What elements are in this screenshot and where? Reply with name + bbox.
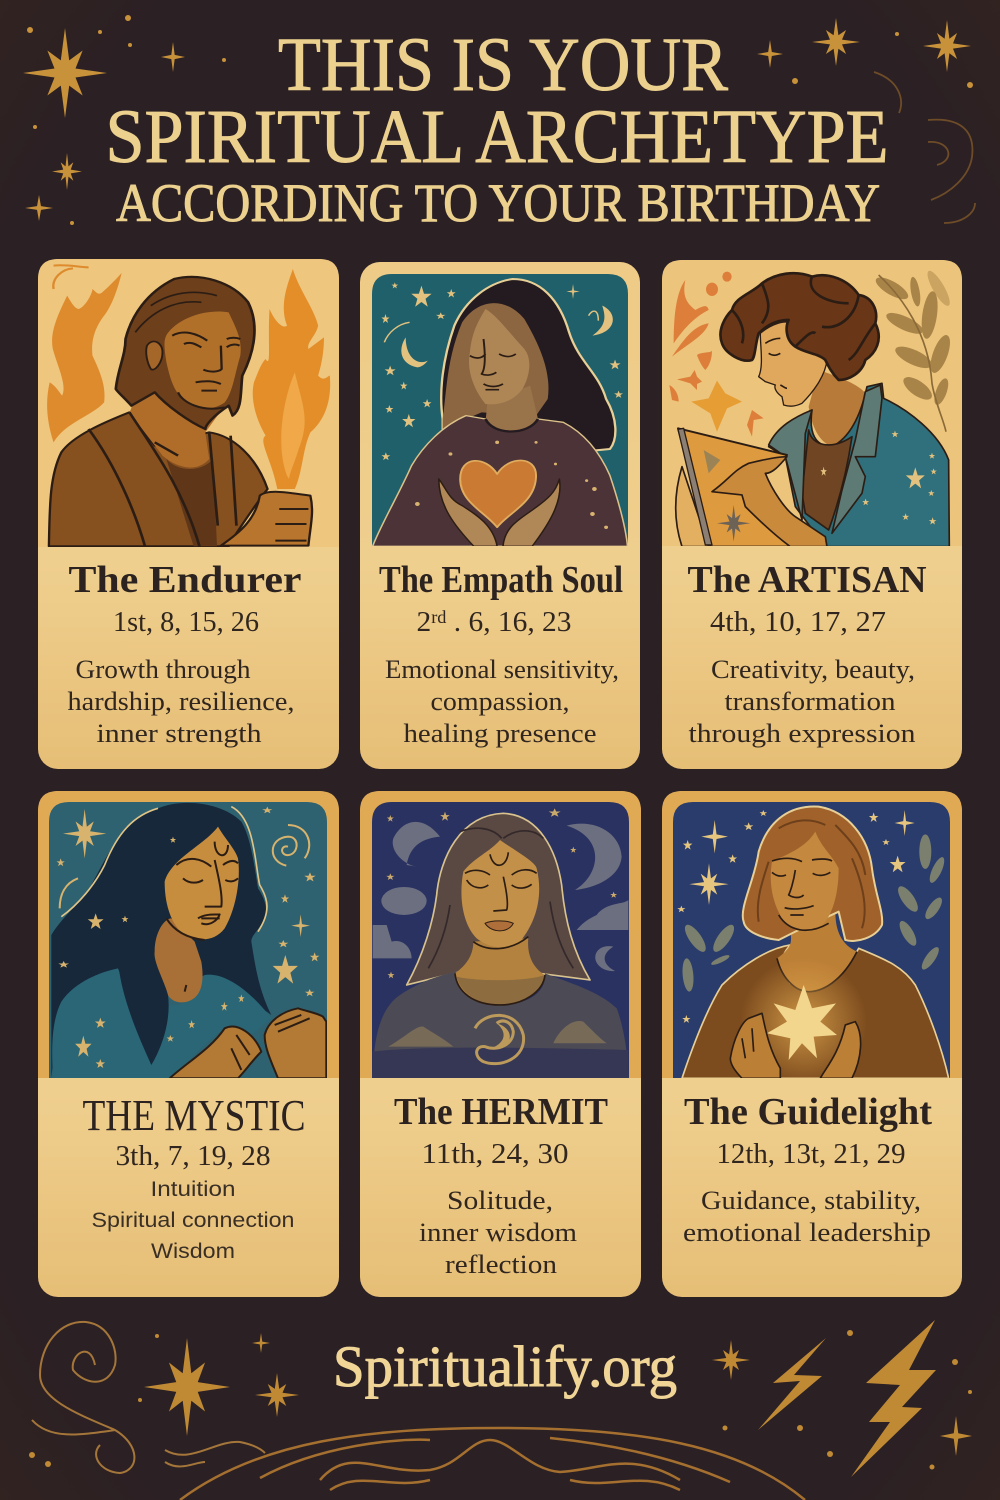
description: Growth through bbox=[76, 655, 250, 684]
card: The Guidelight bbox=[662, 791, 962, 1297]
title: SPIRITUAL ARCHETYPE bbox=[106, 95, 888, 179]
illustration: woman with glowing star bbox=[673, 802, 950, 1085]
card: The Artisan bbox=[662, 260, 962, 769]
illustration: man with flames bbox=[38, 259, 339, 547]
illustration: hermit with moon bbox=[372, 802, 629, 1078]
birthdays: 2 bbox=[416, 606, 431, 638]
image frame bbox=[38, 791, 339, 1078]
card: The Endurer bbox=[38, 259, 339, 769]
description bbox=[683, 1186, 931, 1247]
birthdays: 1st, 8, 15, 26 bbox=[113, 606, 259, 638]
birthdays: 11th, 24, 30 bbox=[422, 1138, 568, 1170]
birthdays: 3th, 7, 19, 28 bbox=[116, 1141, 270, 1172]
title: ACCORDING TO YOUR BIRTHDAY bbox=[116, 173, 880, 233]
footer decoration: bottom arc bbox=[180, 1428, 805, 1500]
description: Solitude, bbox=[447, 1186, 553, 1215]
description: Intuition bbox=[150, 1178, 236, 1201]
illustration: mystic with dark hair bbox=[49, 802, 327, 1078]
name: The HERMIT bbox=[394, 1091, 608, 1133]
description: Creativity, beauty, bbox=[711, 655, 915, 684]
description bbox=[385, 655, 619, 748]
image frame bbox=[662, 791, 962, 1078]
name: THE MYSTIC bbox=[82, 1091, 306, 1140]
birthdays: . 6, 16, 23 bbox=[446, 606, 572, 638]
footer decorations: stars and swirls bbox=[29, 1322, 299, 1473]
description bbox=[92, 1178, 294, 1263]
birthdays: 4th, 10, 17, 27 bbox=[710, 606, 886, 638]
description: transformation bbox=[724, 687, 896, 716]
description: compassion, bbox=[430, 687, 570, 716]
description bbox=[688, 655, 916, 748]
birthdays: 12th, 13t, 21, 29 bbox=[716, 1138, 906, 1170]
description: emotional leadership bbox=[683, 1218, 931, 1247]
description: reflection bbox=[445, 1250, 557, 1279]
description: Emotional sensitivity, bbox=[385, 655, 619, 684]
description: healing presence bbox=[404, 719, 596, 748]
description: Spiritual connection bbox=[92, 1209, 294, 1232]
image frame bbox=[360, 791, 641, 1078]
description: inner strength bbox=[96, 719, 262, 748]
description: inner wisdom bbox=[419, 1218, 577, 1247]
description bbox=[68, 655, 294, 748]
illustration: artist with book bbox=[662, 260, 962, 547]
illustration: woman holding heart bbox=[372, 274, 628, 546]
description bbox=[419, 1186, 577, 1279]
card: The Empath Soul bbox=[360, 262, 640, 769]
title bbox=[106, 23, 888, 233]
name: The Empath Soul bbox=[379, 559, 623, 601]
footer decorations: lightning and stars bbox=[712, 1320, 972, 1477]
description: hardship, resilience, bbox=[68, 687, 294, 716]
name: The Guidelight bbox=[684, 1091, 932, 1133]
description: through expression bbox=[688, 719, 916, 748]
name: The ARTISAN bbox=[688, 559, 926, 601]
footer website: Spiritualify.org bbox=[333, 1334, 677, 1399]
card: The Hermit bbox=[360, 791, 641, 1297]
birthdays: rd bbox=[431, 607, 446, 627]
header decorative stars bbox=[23, 15, 975, 225]
description: Wisdom bbox=[151, 1240, 235, 1263]
description: Guidance, stability, bbox=[701, 1186, 921, 1215]
name: The Endurer bbox=[68, 559, 302, 601]
card: The Mystic bbox=[38, 791, 339, 1297]
title: THIS IS YOUR bbox=[278, 23, 728, 107]
